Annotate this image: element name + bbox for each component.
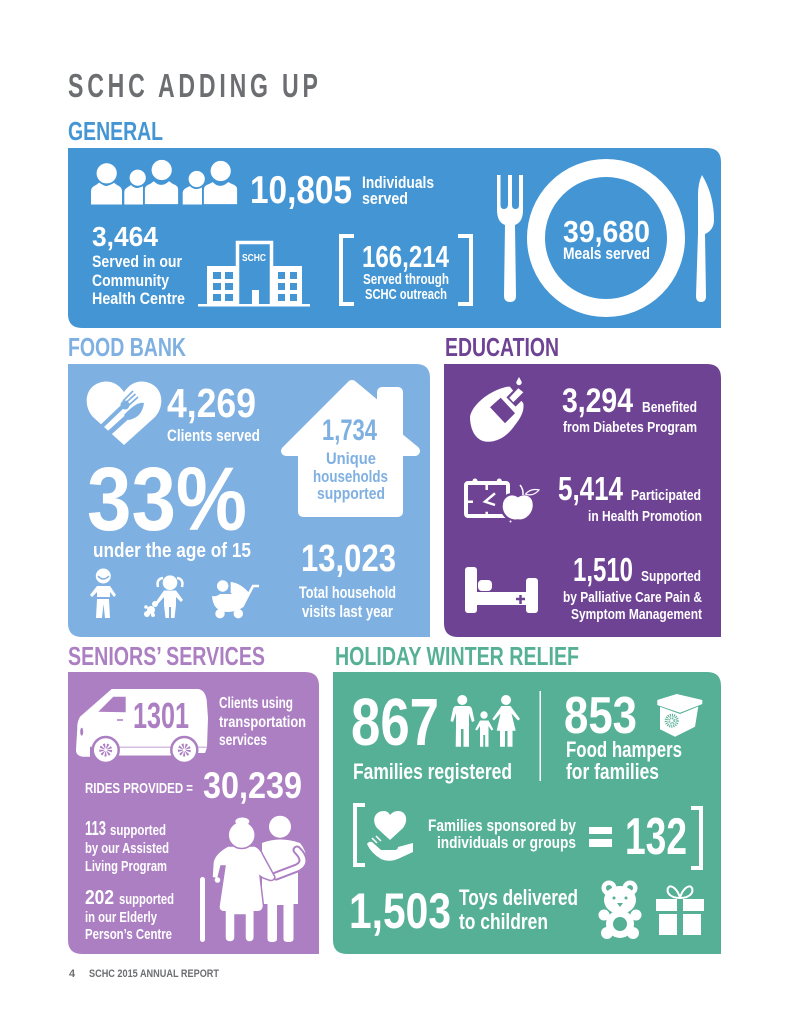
stat: elderly person's centre: Person’s Centre xyxy=(85,926,172,943)
heading: holiday winter relief: HOLIDAY WINTER RELIEF xyxy=(335,641,579,671)
stat: total household visits: Total household xyxy=(299,583,396,602)
stat: clients served: Clients served xyxy=(167,426,260,445)
icon: house with households: Unique xyxy=(326,449,376,468)
icon: girl with teddy xyxy=(144,575,183,618)
stat: rides provided: RIDES PROVIDED = xyxy=(85,780,193,797)
stat: community health centre: Served in our xyxy=(92,252,182,271)
panel: holiday winter relief xyxy=(333,672,721,954)
divider xyxy=(540,691,541,781)
stat: clients served: 4,269 xyxy=(167,380,256,426)
stat: toys delivered: 1,503 xyxy=(349,883,451,939)
stat: total household visits xyxy=(299,538,396,621)
stat: palliative care: Supported xyxy=(641,568,701,585)
icon: family xyxy=(450,695,520,747)
icon: hospital bed xyxy=(465,567,538,613)
icon: house with households xyxy=(286,385,415,512)
icon: boy xyxy=(90,568,116,618)
stat: diabetes program xyxy=(562,382,697,436)
stat: food hampers: for families xyxy=(566,759,659,784)
panel: general xyxy=(68,148,721,328)
stat: individuals served: 10,805 xyxy=(250,169,352,212)
text: clients using transportation: transportation xyxy=(219,714,306,731)
stat: community health centre xyxy=(92,221,185,308)
stat: under the age of 15: under the age of 15 xyxy=(93,540,251,562)
stat: families registered: 867 xyxy=(351,685,439,760)
stat: clients served xyxy=(167,380,260,445)
stat: under the age of 15: 33% xyxy=(87,450,247,550)
icon: stroller xyxy=(212,580,259,618)
stat: elderly person's centre: supported xyxy=(119,891,174,908)
stat: community health centre: Health Centre xyxy=(92,289,185,308)
stat: individuals served: Individuals xyxy=(362,173,434,192)
text: clients using transportation: Clients using xyxy=(219,695,293,712)
text: clients using transportation xyxy=(219,695,306,749)
icon: house with households: 1,734 xyxy=(322,414,377,447)
icon: elderly couple xyxy=(200,816,306,942)
icon: group of people xyxy=(91,159,238,205)
stat: families registered xyxy=(351,685,512,784)
stat: diabetes program: from Diabetes Program xyxy=(563,419,697,436)
stat: served through outreach: Served through xyxy=(363,271,449,288)
icon: house with households: households xyxy=(313,467,388,486)
icon: gift box xyxy=(656,886,704,935)
stat: food hampers: Food hampers xyxy=(566,737,682,762)
footer: SCHC 2015 ANNUAL REPORT xyxy=(89,968,219,980)
bracket stat: families sponsored: individuals or groups xyxy=(437,833,576,852)
panel: seniors' services xyxy=(68,672,319,954)
stat: diabetes program: 3,294 xyxy=(562,382,633,420)
stat: families registered: Families registered xyxy=(353,759,512,784)
panel: education xyxy=(444,364,721,637)
stat: food hampers xyxy=(564,687,682,784)
panel: food bank xyxy=(68,364,430,637)
stat: toys delivered xyxy=(349,883,578,939)
icon: van with client count: 1301 xyxy=(133,695,189,736)
stat: food hampers: 853 xyxy=(564,687,637,745)
stat: total household visits: visits last year xyxy=(302,602,393,621)
stat: toys delivered: Toys delivered xyxy=(459,885,578,910)
icon: hamper box xyxy=(657,694,702,737)
stat: individuals served: served xyxy=(362,189,408,208)
icon: hand holding heart xyxy=(367,811,413,861)
stat: rides provided: 30,239 xyxy=(203,765,302,806)
icon: teddy bear xyxy=(598,880,642,939)
icon: plate with meals served xyxy=(536,168,676,308)
stat: toys delivered: to children xyxy=(459,909,548,934)
icon: fork xyxy=(497,175,523,302)
heading: education: EDUCATION xyxy=(445,332,559,362)
stat: health promotion: 5,414 xyxy=(558,470,623,507)
stat: community health centre: Community xyxy=(92,271,169,290)
stat: palliative care: by Palliative Care Pain & xyxy=(563,589,702,606)
icon: clock and apple xyxy=(466,478,539,522)
stat: assisted living: by our Assisted xyxy=(85,840,169,857)
icon: house with households: supported xyxy=(317,484,385,503)
stat: health promotion xyxy=(558,470,702,525)
stat: served through outreach: 166,214 xyxy=(362,239,450,274)
footer: 4 xyxy=(69,968,76,980)
stat: palliative care: Symptom Management xyxy=(571,606,702,623)
icon: plate with meals served: Meals served xyxy=(563,244,650,263)
stat: diabetes program: Benefited xyxy=(642,399,697,416)
stat: assisted living: 113 xyxy=(85,818,106,840)
icon: heart with fork and knife xyxy=(87,382,161,445)
stat: assisted living: Living Program xyxy=(85,858,167,875)
stat: community health centre: 3,464 xyxy=(92,221,158,252)
stat: health promotion: Participated xyxy=(631,487,701,504)
icon: van with client count xyxy=(76,689,208,763)
stat: served through outreach: SCHC outreach xyxy=(365,286,447,303)
icon: SCHC building xyxy=(198,241,310,306)
bracket stat: families sponsored: Families sponsored by xyxy=(428,816,576,835)
icon: plate with meals served: 39,680 xyxy=(563,214,650,249)
stat: palliative care xyxy=(563,551,702,623)
icon: knife xyxy=(696,175,714,302)
heading: seniors' services: SENIORS’ SERVICES xyxy=(68,641,265,671)
heading: food bank: FOOD BANK xyxy=(68,332,186,362)
stat: served through outreach xyxy=(341,236,471,304)
stat: elderly person's centre xyxy=(85,887,174,943)
text: clients using transportation: services xyxy=(219,732,267,749)
stat: assisted living: supported xyxy=(110,822,166,839)
heading: general: GENERAL xyxy=(68,116,163,146)
stat: assisted living xyxy=(85,818,169,875)
icon: glucose meter xyxy=(470,377,525,442)
stat: palliative care: 1,510 xyxy=(573,551,633,588)
title: SCHC ADDING UP xyxy=(68,68,318,105)
stat: rides provided xyxy=(85,765,302,806)
stat: elderly person's centre: in our Elderly xyxy=(85,909,157,926)
stat: elderly person's centre: 202 xyxy=(85,887,114,909)
icon: SCHC building: SCHC xyxy=(242,253,266,264)
stat: individuals served xyxy=(250,169,434,212)
stat: health promotion: in Health Promotion xyxy=(588,508,702,525)
bracket stat: families sponsored: 132 xyxy=(625,808,687,866)
stat: total household visits: 13,023 xyxy=(301,538,396,580)
bracket stat: families sponsored xyxy=(355,805,701,868)
